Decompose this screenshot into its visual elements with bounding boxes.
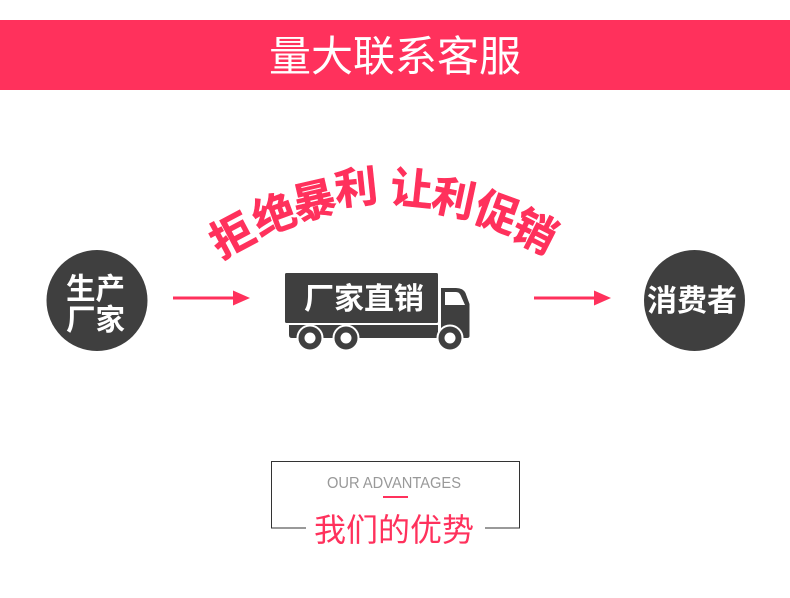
manufacturer circle: 厂家 — [66, 304, 125, 337]
arched slogan — [203, 163, 564, 268]
icon: delivery truck — [285, 273, 470, 350]
manufacturer circle — [46, 250, 148, 351]
consumer circle — [644, 250, 745, 351]
arched slogan: 暴 — [288, 174, 341, 230]
arrow: truck to consumer — [534, 290, 611, 306]
arched slogan: 促 — [468, 184, 525, 244]
advantages heading: 我们的优势 — [314, 512, 474, 548]
arched slogan: 绝 — [246, 186, 303, 246]
arched slogan: 利 — [428, 172, 480, 228]
english subtitle: OUR ADVANTAGES — [327, 475, 461, 492]
advantages frame — [272, 462, 520, 548]
arched slogan: 利 — [332, 163, 380, 215]
accent bar — [383, 496, 408, 498]
header banner — [0, 20, 790, 90]
arrow: manufacturer to truck — [173, 290, 250, 306]
arched slogan: 拒 — [203, 205, 263, 268]
arched slogan: 让 — [388, 164, 436, 216]
truck wheels — [298, 326, 462, 350]
banner title: 量大联系客服 — [269, 33, 521, 80]
consumer circle: 消费者 — [647, 285, 737, 318]
arched slogan: 销 — [504, 202, 564, 264]
manufacturer circle: 生产 — [66, 273, 125, 306]
truck label: 厂家直销 — [304, 283, 424, 316]
